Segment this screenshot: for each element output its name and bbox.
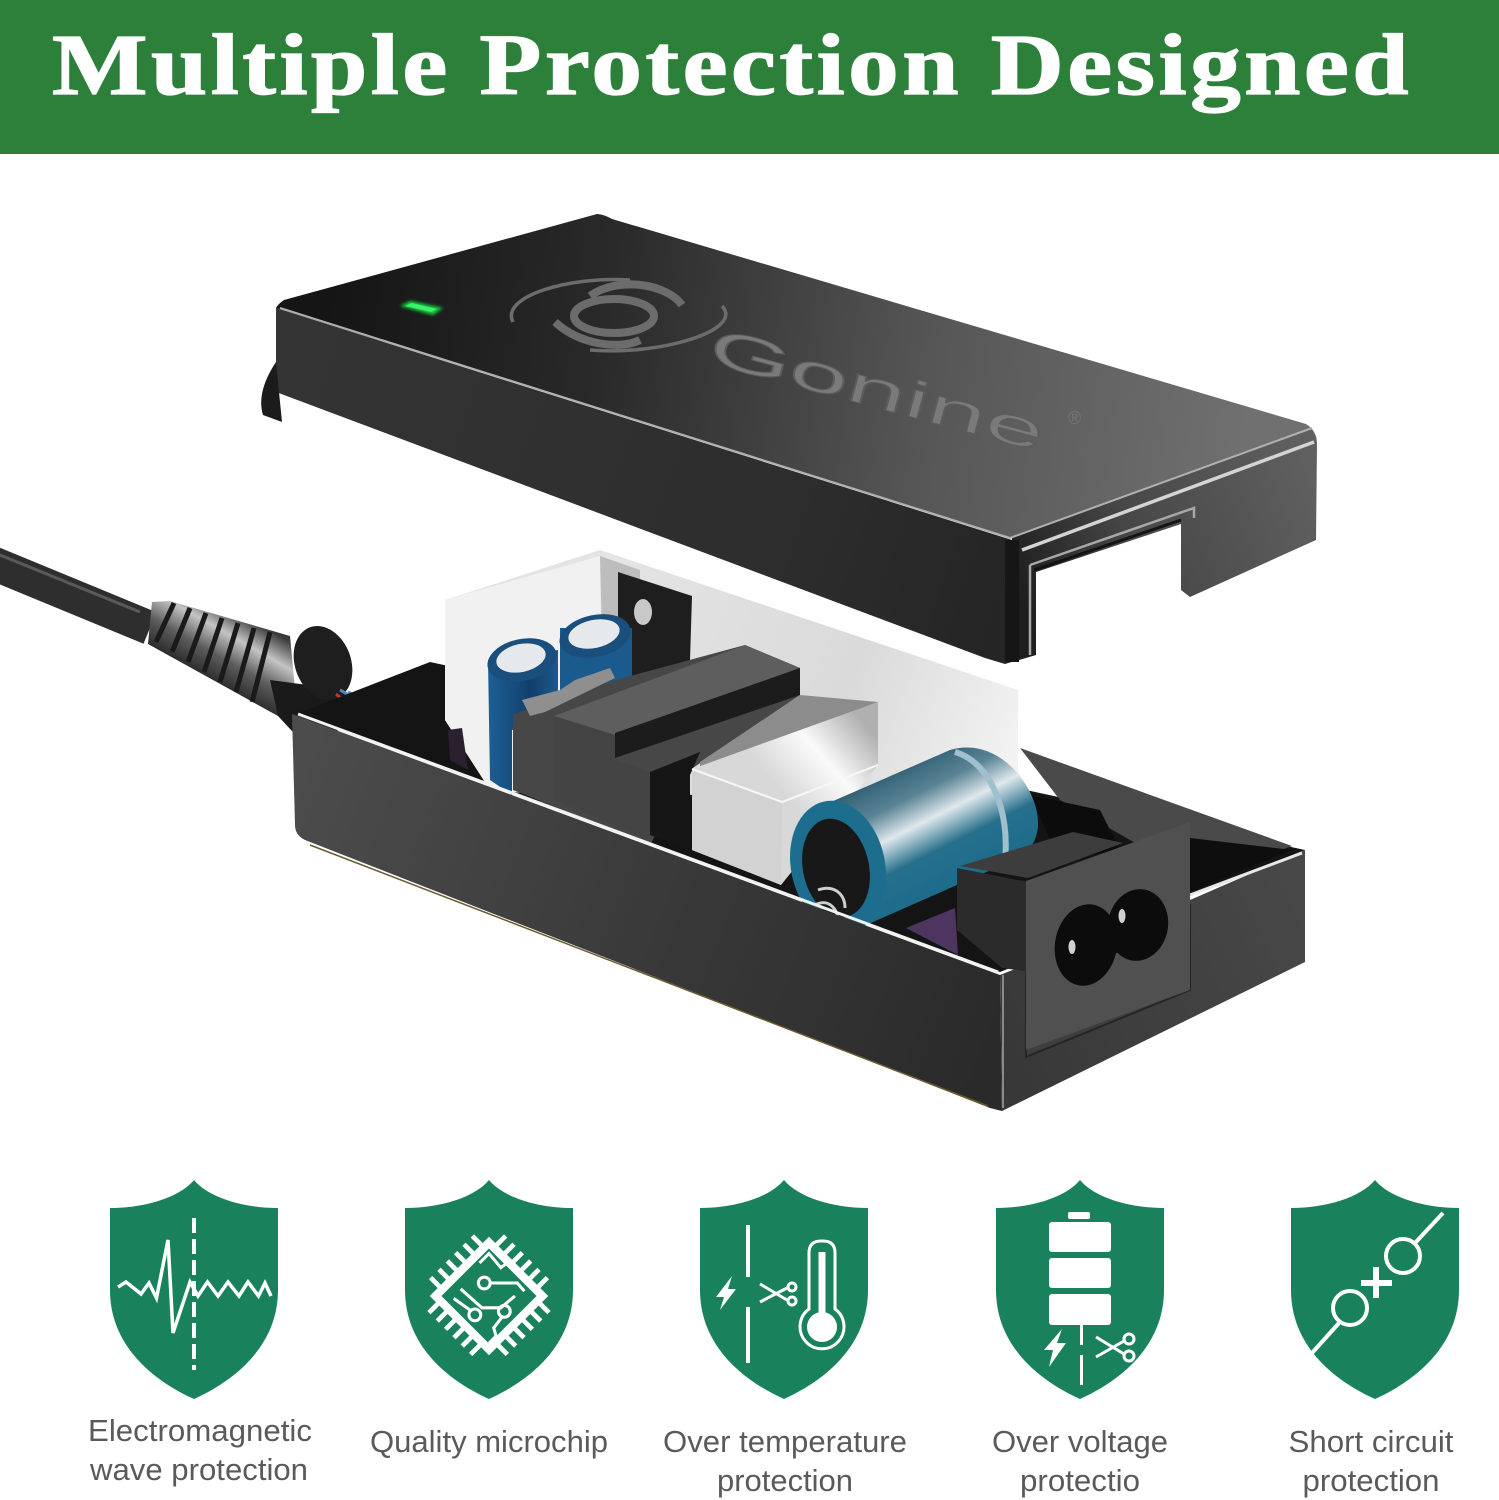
protection feature: over voltage [992, 1180, 1168, 1498]
label line 2: protection [1302, 1463, 1440, 1498]
label: Short circuit [1288, 1424, 1454, 1459]
brand logo mark [511, 279, 726, 351]
lower case front wall [292, 714, 1002, 1111]
small blue capacitors [560, 628, 632, 730]
protection feature: short circuit [1288, 1180, 1459, 1498]
title banner [0, 0, 1499, 154]
upper lid top surface [276, 214, 1316, 538]
white shield can [692, 702, 878, 885]
product illustration: opened power adapter [0, 214, 1317, 1111]
large capacitor [798, 747, 1038, 930]
protection feature: microchip [370, 1180, 608, 1459]
AC power socket [957, 822, 1190, 1057]
upper lid side wall [276, 308, 1035, 664]
heat sink [618, 572, 692, 690]
lower case end wall [1000, 850, 1305, 1111]
upper lid rear bump [261, 362, 282, 422]
lid edge highlights [280, 308, 1312, 538]
lower case interior [296, 662, 1305, 972]
shield icon [996, 1180, 1164, 1399]
protection feature: over temperature [663, 1180, 907, 1498]
upper lid end wall with notch [1012, 430, 1317, 662]
label line 2: wave protection [89, 1452, 308, 1487]
registered mark: ® [1068, 408, 1081, 428]
case rim highlights [298, 714, 998, 972]
title: Multiple Protection Designed [52, 16, 1412, 113]
shield icon [405, 1180, 573, 1399]
grey wedge behind shield [700, 695, 878, 770]
label: Quality microchip [370, 1424, 608, 1459]
shield icon [1291, 1180, 1459, 1399]
label: Electromagnetic [88, 1413, 312, 1448]
label line 2: protection [717, 1463, 853, 1498]
label: Over temperature [663, 1424, 907, 1459]
shield icon [110, 1180, 278, 1399]
circuit board interior [445, 556, 1038, 955]
cable and strain relief [0, 553, 378, 745]
transformer block [513, 645, 800, 845]
protection feature: electromagnetic wave [88, 1180, 312, 1487]
label: Over voltage [992, 1424, 1168, 1459]
brand name: Gonine [703, 318, 1051, 463]
circuit board back panel [445, 550, 1030, 800]
shield icon [700, 1180, 868, 1399]
indicator LED [400, 301, 443, 315]
label line 2: protectio [1020, 1463, 1140, 1498]
